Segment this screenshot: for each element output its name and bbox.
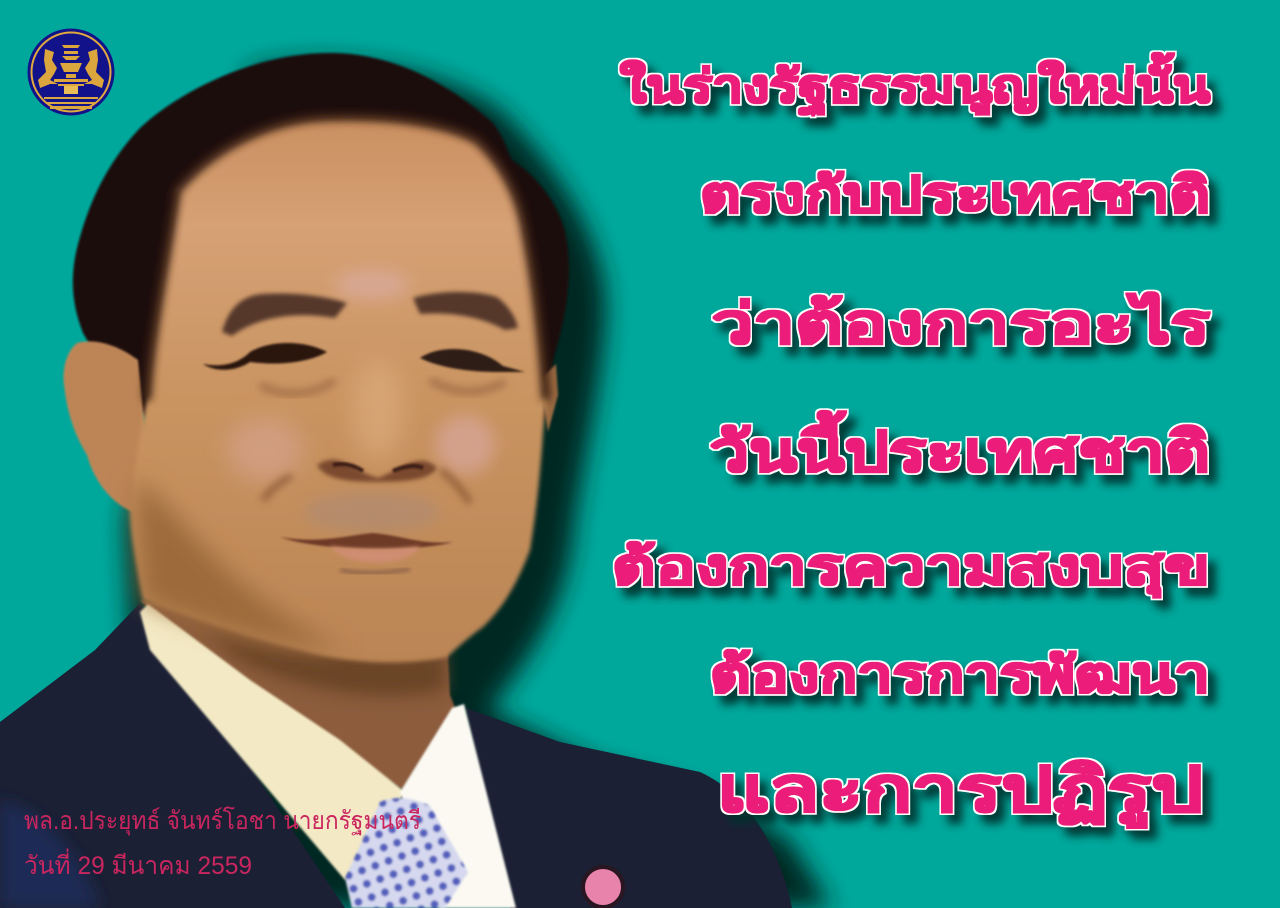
cheek highlight right: [435, 415, 495, 475]
quote text: [612, 52, 1211, 828]
right ear: [540, 364, 558, 432]
shirt collar left: [140, 604, 405, 880]
portrait drop shadow: [125, 61, 832, 908]
quote line 6: ต้องการการพัฒนา: [710, 647, 1210, 703]
philtrum shading: [304, 492, 440, 532]
chin shadow: [200, 625, 446, 696]
cheek highlight left: [227, 418, 303, 482]
government seal: [28, 28, 114, 116]
left eyebrow: [222, 293, 347, 336]
nostrils: [333, 464, 423, 471]
smile folds: [263, 470, 470, 503]
seal emblem: [38, 45, 104, 109]
right eyebrow: [413, 292, 518, 330]
quote line 4: วันนี้ประเทศชาติ: [710, 411, 1210, 483]
speaker name: พล.อ.ประยุทธ์ จันทร์โอชา นายกรัฐมนตรี: [24, 806, 421, 836]
mouth: [280, 533, 453, 549]
hair: [73, 53, 569, 420]
portrait: [0, 53, 792, 908]
face: [130, 117, 546, 662]
nose underside: [317, 460, 437, 482]
neck: [140, 600, 456, 790]
suit: [0, 603, 792, 908]
under-eye shading: [260, 380, 505, 393]
date: วันที่ 29 มีนาคม 2559: [24, 848, 252, 880]
suit shading: [0, 800, 100, 908]
quote line 3: ว่าต้องการอะไร: [712, 291, 1210, 355]
quote line 7: และการปฏิรูป: [717, 756, 1203, 828]
brow highlight: [334, 269, 410, 301]
seal ring: [32, 32, 110, 112]
lower lip: [330, 546, 420, 562]
tie: [345, 798, 468, 908]
quote line 2: ตรงกับประเทศชาติ: [700, 167, 1210, 223]
lapel pin: [583, 867, 623, 907]
right eye: [420, 349, 525, 372]
attribution: [24, 806, 421, 880]
left eye: [203, 343, 327, 370]
left jaw shading: [135, 480, 345, 650]
nose bridge highlight: [352, 360, 404, 460]
hairline shading: [147, 117, 546, 400]
left ear: [64, 341, 150, 512]
shirt collar right: [400, 704, 516, 908]
quote line 5: ต้องการความสงบสุข: [612, 539, 1210, 598]
seal disc: [28, 28, 114, 116]
under-lip shading: [340, 569, 410, 573]
quote line 1: ในร่างรัฐธรรมนูญใหม่นั้น: [620, 52, 1211, 116]
